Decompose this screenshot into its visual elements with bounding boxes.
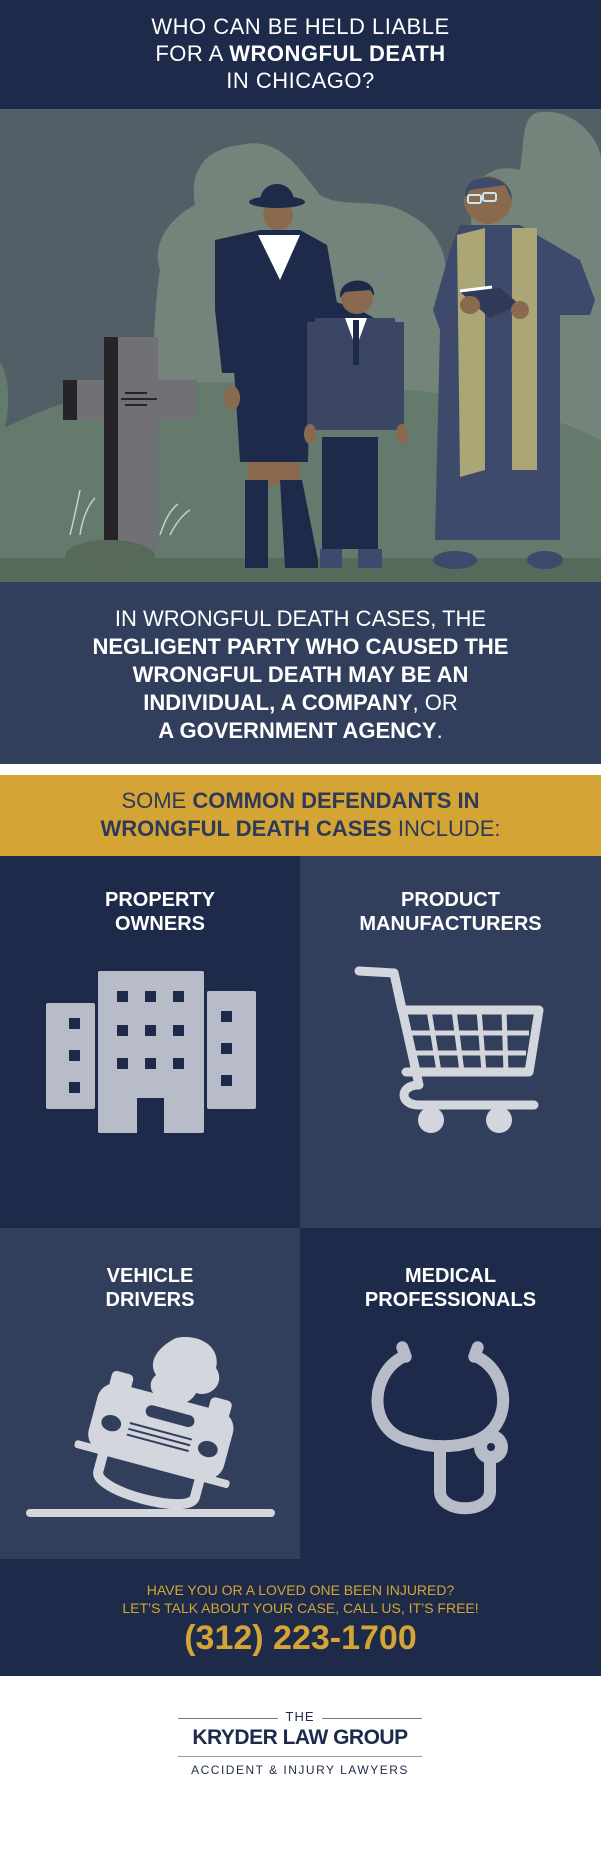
logo: Kryder Law Group: ACCIDENT & INJURY LAWYERS xyxy=(191,1763,409,1777)
CTA text: HAVE YOU OR A LOVED ONE BEEN INJURED? xyxy=(147,1582,454,1598)
banner: common defendants: SOME COMMON DEFENDANTS IN xyxy=(121,788,480,813)
panel: negligent party statement: NEGLIGENT PARTY WHO CAUSED THE xyxy=(92,634,508,659)
plants xyxy=(70,490,190,535)
hills xyxy=(0,382,601,582)
panel: negligent party statement: A GOVERNMENT AGENCY. xyxy=(158,718,443,743)
label: DRIVERS xyxy=(106,1289,194,1311)
header: title: FOR A WRONGFUL DEATH xyxy=(155,41,446,66)
icon: overturned car xyxy=(26,1337,275,1517)
CTA text xyxy=(122,1582,479,1616)
label: MANUFACTURERS xyxy=(359,913,542,935)
label xyxy=(359,889,542,935)
panel: product manufacturers xyxy=(300,856,601,1228)
call to action xyxy=(0,1559,601,1676)
label: OWNERS xyxy=(115,913,205,935)
panel: negligent party statement: WRONGFUL DEATH MAY BE AN xyxy=(133,662,468,687)
label xyxy=(106,1265,194,1311)
logo: Kryder Law Group: THE xyxy=(286,1709,314,1724)
logo: Kryder Law Group: KRYDER LAW GROUP xyxy=(192,1726,408,1749)
boy figure xyxy=(304,280,408,568)
CTA text: LET’S TALK ABOUT YOUR CASE, CALL US, IT’S FREE! xyxy=(122,1600,479,1616)
label xyxy=(105,889,215,935)
icon: buildings xyxy=(46,971,256,1133)
label: PROFESSIONALS xyxy=(365,1289,536,1311)
header: title: WHO CAN BE HELD LIABLE xyxy=(151,14,450,39)
banner: common defendants xyxy=(0,775,601,856)
icon: shopping cart xyxy=(354,966,544,1133)
panel: negligent party statement xyxy=(0,582,601,764)
icon: stethoscope xyxy=(372,1341,510,1514)
header: title xyxy=(0,0,601,109)
panel: negligent party statement: INDIVIDUAL, A COMPANY, OR xyxy=(143,690,458,715)
banner: common defendants: WRONGFUL DEATH CASES INCLUDE: xyxy=(100,816,501,841)
header: title: IN CHICAGO? xyxy=(226,68,375,93)
label: VEHICLE xyxy=(107,1265,193,1287)
label: PRODUCT xyxy=(401,889,500,911)
illustration: funeral scene xyxy=(0,109,601,582)
phone number: (312) 223-1700 xyxy=(184,1619,417,1657)
label: MEDICAL xyxy=(405,1265,496,1287)
priest figure xyxy=(433,176,595,569)
panel: property owners xyxy=(0,856,300,1228)
cross tombstone xyxy=(63,337,197,572)
label xyxy=(365,1265,536,1311)
panel: negligent party statement: IN WRONGFUL DEATH CASES, THE xyxy=(115,606,486,631)
bushes xyxy=(153,112,601,560)
panel: medical professionals xyxy=(300,1228,601,1559)
label: PROPERTY xyxy=(105,889,215,911)
logo: Kryder Law Group xyxy=(178,1709,422,1777)
woman figure xyxy=(215,184,402,568)
panel: vehicle drivers xyxy=(0,1228,300,1559)
